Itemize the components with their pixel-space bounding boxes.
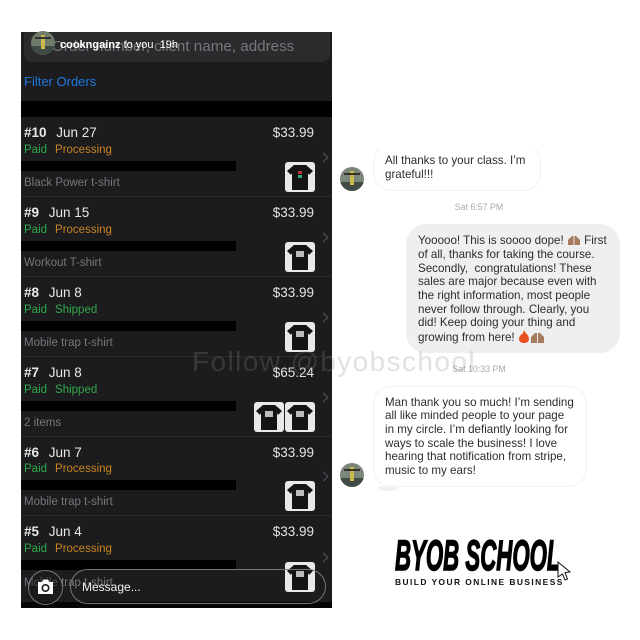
order row 6: #6 Jun 7 (24, 445, 82, 460)
timestamp: Sat 6:57 PM (455, 202, 503, 212)
message: man thank you: hearing that notification from stripe, (385, 450, 566, 463)
order row 7: #7 Jun 8 (24, 365, 82, 380)
order row 6: Paid Processing (24, 463, 112, 475)
message: reply bubble: did! Keep doing your thing and (418, 316, 575, 329)
message: man thank you: Man thank you so much! I’m sending (385, 396, 574, 409)
order row 10: #10 Jun 27 (24, 125, 97, 140)
message: all thanks: grateful!!! (385, 168, 433, 181)
message: man thank you: all like minded people to your page (385, 409, 564, 422)
message: all thanks (340, 150, 541, 191)
redaction bar (21, 101, 332, 117)
search placeholder text: Order number, client name, address (52, 38, 294, 55)
order row 8 (21, 285, 328, 352)
order row 8: Paid Shipped (24, 304, 97, 316)
story username line: cookngainz to you 19h (60, 39, 178, 51)
order row 5: Mobile trap t-shirt (24, 577, 113, 589)
message: reply bubble: never follow through. Clearly, you (418, 302, 589, 316)
order row 10: Black Power t-shirt (24, 177, 120, 189)
message: reply bubble: of all, thanks for taking the course. (418, 248, 595, 261)
order row 6 (21, 445, 328, 511)
bottom black strip (21, 602, 332, 608)
order row 5: #5 Jun 4 (24, 524, 82, 539)
order row 10: Paid Processing (24, 144, 112, 156)
timestamp: Sat 10:33 PM (452, 364, 506, 374)
filter orders link: Filter Orders (24, 74, 96, 89)
order row 10: $33.99 (273, 125, 314, 140)
order row 5: Paid Processing (24, 543, 112, 555)
message: reply bubble: Yooooo! This is soooo dope! First (418, 234, 607, 247)
logo tagline: BUILD YOUR ONLINE BUSINESS (395, 577, 564, 587)
message: reply bubble: the right information, most people (418, 289, 590, 302)
message: reply bubble: Secondly, congratulations! These (418, 262, 592, 274)
logo wordmark: BYOB SCHOOL (395, 532, 561, 580)
order row 7 (21, 365, 328, 432)
search box (24, 32, 330, 62)
story reply message field (70, 569, 326, 604)
order row 8: $33.99 (273, 285, 314, 300)
message: reply bubble: sales are major because even with (418, 275, 597, 288)
order row 8: #8 Jun 8 (24, 285, 82, 300)
avatar (340, 167, 364, 191)
order row 5 (21, 524, 328, 592)
story avatar (31, 31, 55, 55)
panel: orders phone screenshot (21, 32, 332, 608)
watermark: Follow @byobschool (192, 346, 476, 377)
order row 7: Paid Shipped (24, 384, 97, 396)
story reply camera button (28, 570, 63, 605)
message: man thank you: ways to scale the business! I love (385, 437, 557, 450)
message: man thank you (340, 386, 587, 487)
order row 10 (21, 125, 328, 192)
icon: cursor (558, 561, 571, 581)
order row 9: Workout T-shirt (24, 257, 102, 269)
order row 6: Mobile trap t-shirt (24, 496, 113, 508)
message: man thank you: music to my ears! (385, 464, 476, 477)
avatar (340, 463, 364, 487)
order row 5: $33.99 (273, 524, 314, 539)
order row 9: Paid Processing (24, 224, 112, 236)
order row 6: $33.99 (273, 445, 314, 460)
reaction chip (378, 486, 398, 491)
bubble (373, 386, 587, 487)
order row 9: #9 Jun 15 (24, 205, 89, 220)
message: all thanks: All thanks to your class. I’m (385, 154, 525, 167)
message: man thank you: in my circle. I’m defiantly looking for (385, 423, 568, 436)
message: reply bubble (406, 224, 620, 353)
order row 7: 2 items (24, 417, 61, 429)
order row 9 (21, 205, 328, 272)
bubble (373, 144, 541, 191)
logo: BYOB School (394, 532, 571, 587)
message placeholder: Message... (82, 580, 141, 594)
message: reply bubble: growing from here! (418, 331, 515, 344)
order row 7: $65.24 (273, 365, 314, 380)
order row 8: Mobile trap t-shirt (24, 337, 113, 349)
order row 9: $33.99 (273, 205, 314, 220)
